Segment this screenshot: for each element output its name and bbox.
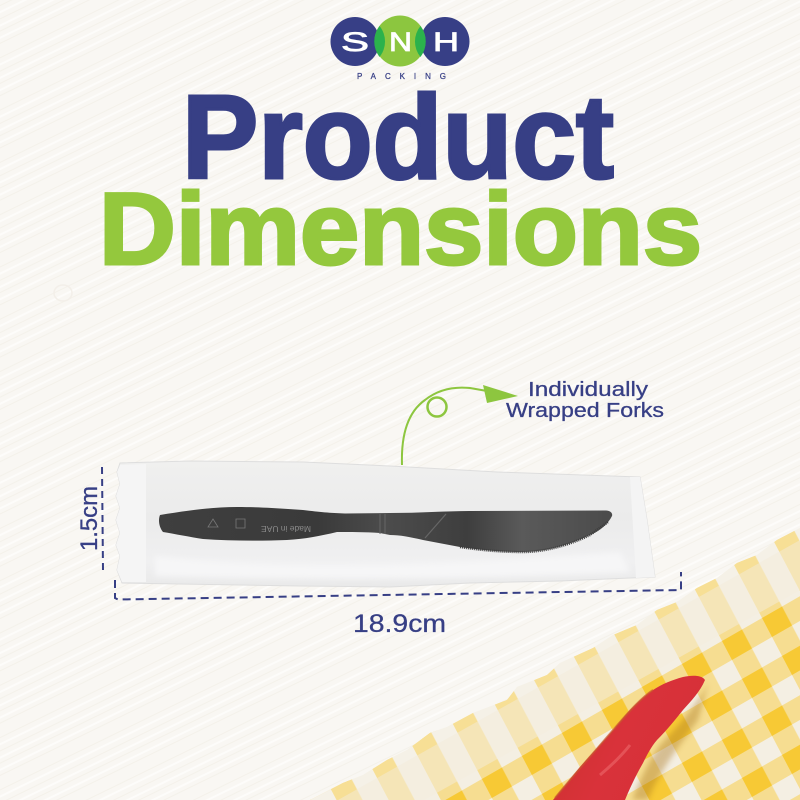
wrapped packet with knife xyxy=(116,461,655,587)
chili rim xyxy=(555,690,653,798)
height label: 1.5cm xyxy=(76,486,103,551)
embossed symbols xyxy=(208,519,245,528)
logo letter S: S xyxy=(341,27,369,57)
dimension: width xyxy=(115,572,681,638)
knife bolster line xyxy=(425,514,446,538)
knife handle rib xyxy=(380,514,385,534)
lower highlight xyxy=(155,552,630,579)
plastic wrapper xyxy=(116,461,655,587)
cloth hem second tier xyxy=(338,540,800,800)
embossed marking: Made in UAE xyxy=(261,524,311,533)
arrow loop xyxy=(428,398,446,416)
dimension: height xyxy=(76,467,103,570)
cloth hem band xyxy=(310,528,800,800)
right seal xyxy=(630,477,655,578)
width dashed line xyxy=(115,572,681,600)
height dashed line xyxy=(102,467,103,570)
red chili pepper xyxy=(553,676,705,800)
knife xyxy=(159,507,612,552)
callout text line two: Wrapped Forks xyxy=(506,400,664,422)
logo: SNH Packing xyxy=(330,16,470,81)
tablecloth: yellow gingham xyxy=(310,528,800,800)
arrow callout xyxy=(402,379,664,465)
title: Dimensions: Dimensions xyxy=(99,172,702,286)
logo tagline: PACKING xyxy=(357,72,446,81)
chili shadow xyxy=(632,684,708,800)
arrow curve xyxy=(402,388,487,465)
callout text line one: Individually xyxy=(528,379,648,401)
knife serrated edge xyxy=(460,522,608,552)
arrow head xyxy=(483,385,518,403)
width label: 18.9cm xyxy=(353,610,446,638)
logo letter H: H xyxy=(433,27,459,57)
chili highlight xyxy=(600,745,630,775)
left seal xyxy=(116,464,146,582)
logo letter N: N xyxy=(389,27,412,57)
title: Product: Product xyxy=(182,71,614,204)
